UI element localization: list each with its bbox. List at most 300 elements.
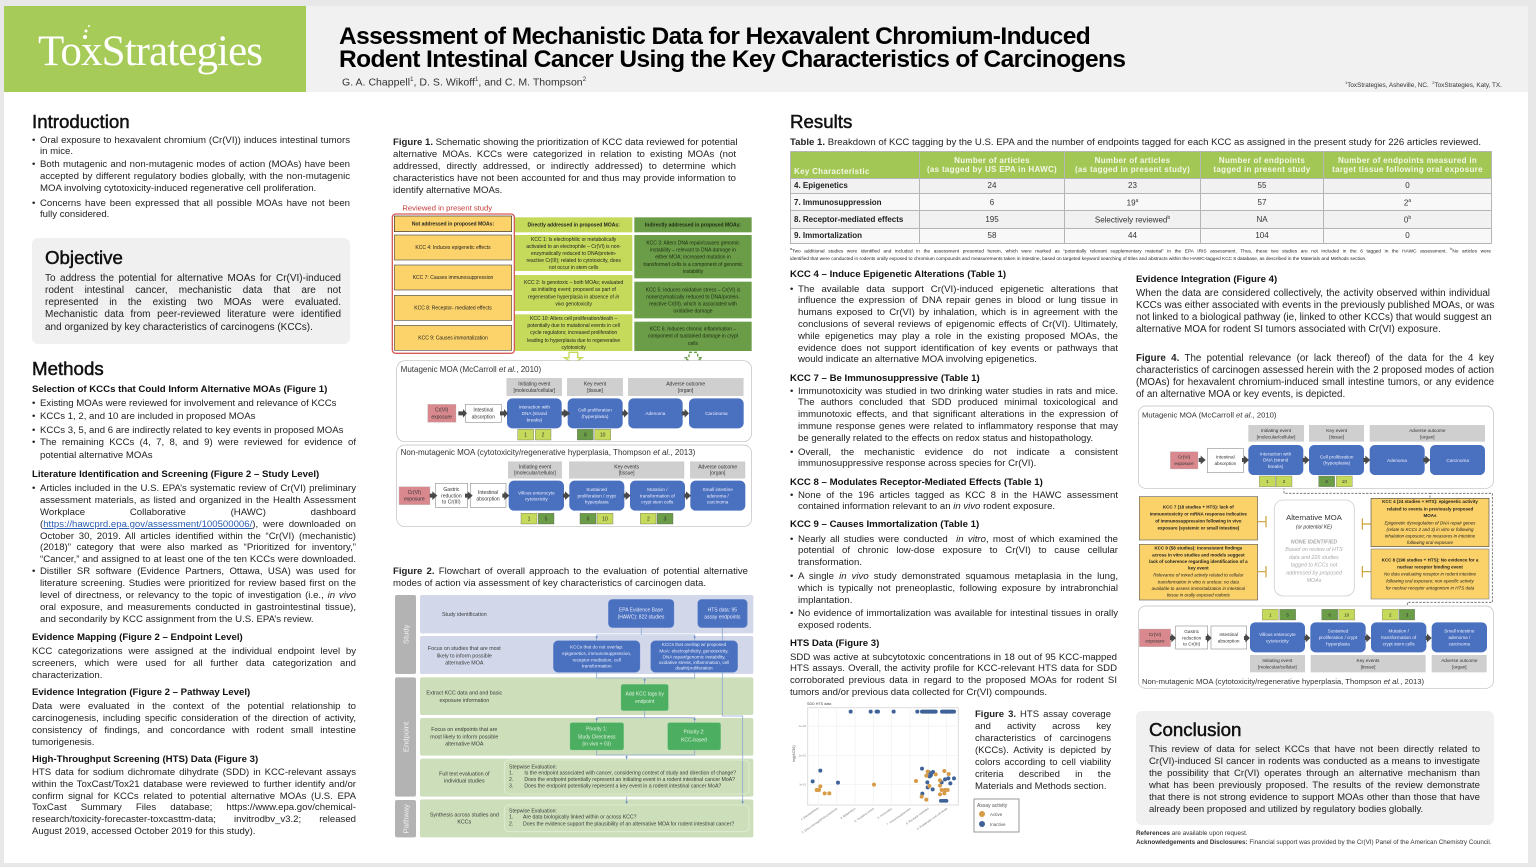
text: evidence mapping	[32, 646, 356, 681]
column: directly addressed: regenerative hyperplasia in absence of in	[528, 294, 619, 300]
text: evidence integration: consistency of findings, and concordance with rodent small intestine	[32, 725, 356, 736]
column: indirectly addressed: either MOA; increased mutation in	[655, 255, 731, 261]
box: KCC 8: for nuclear receptor antagonism in HTS data	[1386, 586, 1475, 591]
row labels: Full text evaluation of	[439, 771, 490, 777]
category axis labels: 1. Electrophilicity	[800, 806, 820, 821]
box: alternative MOA: data and 226 studies	[1289, 555, 1339, 561]
panel: non-mutagenic MOA: 6	[1328, 612, 1331, 617]
table 1: Number of articles	[954, 156, 1030, 164]
box: KCC 8: No data evaluating receptor in rodent intestine	[1384, 572, 1477, 577]
panel: non-mutagenic MOA: exposure	[404, 497, 425, 503]
panel: mutagenic MOA: [tissue]	[1329, 434, 1344, 439]
panel: non-mutagenic MOA: Cr(VI)	[408, 490, 421, 496]
column: indirectly addressed: KCC 5: Induces oxidative stress – Cr(VI) is	[646, 287, 741, 293]
stepwise evaluation boxes: Does the endpoint potentially represent a key event in a rodent intestinal cancer MoA?	[524, 784, 721, 790]
text: literature bullets: “Cancer,” and assigned to at least one of the ten KCCs were downloaded.	[40, 554, 356, 565]
text: literature bullets: Distiller SR software (Evidence Partners, Ottawa, USA) was used for	[40, 566, 356, 577]
text: HTS: research/toxicity-forecaster-toxcasttm-data; invitrodbv_v3.2; released	[32, 814, 356, 825]
text: literature bullets: (https://hawcprd.epa.gov/assessment/100500006/), were downloaded on	[40, 519, 356, 530]
table 1: 55	[1258, 181, 1266, 190]
column: directly addressed: activated to an electrophile – Cr(VI) is non-	[526, 244, 621, 250]
category axis labels: 8. Receptor-mediated	[905, 806, 930, 825]
text: evidence integration results: alternative MOA for rodent SI tumors associated with Cr(VI) exposure.	[1136, 324, 1441, 335]
stepwise evaluation boxes: Stepwise Evaluation:	[509, 764, 557, 770]
figure 3 caption: Materials and Methods section.	[975, 781, 1106, 792]
blue process boxes: KCCs that overlap w/ proposed	[662, 642, 727, 647]
panel: mutagenic MOA: Key event	[584, 382, 607, 388]
subheading: evidence integration: Evidence Integration (Figure 2 – Pathway Level)	[32, 687, 250, 698]
heading: objective: Objective	[45, 247, 123, 268]
text: KCC 7: Immunotoxicity was studied in two drinking water studies in rats and mice.	[798, 386, 1118, 397]
references and acknowledgements	[1136, 830, 1492, 846]
column: indirectly addressed: instability	[683, 269, 704, 275]
panel: non-mutagenic MOA: 5	[545, 517, 548, 523]
stepwise evaluation boxes: Does the endpoint potentially represent an initiating event in a rodent intestinal cancer MoA?	[524, 777, 735, 783]
panel: non-mutagenic MOA: 6	[587, 517, 590, 523]
plot area: 1e+03	[799, 724, 807, 728]
column: directly addressed: KCC 10: Alters cell proliferation/death –	[530, 316, 618, 322]
panel: non-mutagenic MOA: to Cr(III)	[1183, 642, 1201, 647]
panel: non-mutagenic MOA: Key events	[614, 464, 640, 470]
row labels: alternative MOA	[445, 661, 484, 667]
panel: non-mutagenic MOA: crypt stem cells	[1383, 641, 1415, 646]
stepwise evaluation boxes: 1.	[509, 815, 513, 821]
column: directly addressed: KCC 2: Is genotoxic – both MOAs; evaluated	[524, 280, 623, 286]
panel: non-mutagenic MOA: [organ]	[710, 471, 726, 477]
column: not addressed	[394, 216, 512, 350]
text: evidence integration results	[1136, 288, 1494, 335]
text: literature bullets: assessment materials, as listed and organized in the Health Assessment	[40, 495, 356, 506]
text: introduction bullets: Oral exposure to hexavalent chromium (Cr(VI)) induces intestinal tumors	[40, 135, 350, 146]
column: directly addressed: enzymatically reduced to DNA/protein-	[531, 251, 617, 257]
text: HTS: ToxCast Summary Files database; https://www.epa.gov/chemical-	[32, 802, 356, 813]
box: KCC 7: of immunosuppression following in vivo	[1155, 519, 1242, 524]
column: directly addressed: leading to hyperplasia due to regenerative	[527, 338, 620, 344]
box: alternative MOA: MOAs	[1307, 578, 1322, 584]
text: literature bullets: literature screening. Studies were prioritized for review based first on the	[40, 578, 356, 589]
column: directly addressed: Directly addressed in proposed MOAs:	[528, 223, 620, 229]
panel: mutagenic MOA: breaks)	[1268, 464, 1284, 469]
text: selection bullets: potential alternative MOAs	[40, 450, 153, 460]
figure 1 caption: characteristics have not been accounted for and thus may provide information to	[393, 173, 736, 184]
phase labels	[395, 595, 416, 837]
panel: mutagenic MOA: Cell proliferation	[578, 408, 612, 413]
column: directly addressed: cycle regulators; increased proliferation	[530, 330, 617, 336]
panel: mutagenic MOA: [molecular/cellular]	[513, 388, 556, 394]
box: KCC 4: related to events in previously proposed	[1387, 506, 1474, 511]
panel: mutagenic MOA: Intestinal	[1216, 454, 1235, 459]
subheading: HTS: High-Throughput Screening (HTS) Data (Figure 3)	[32, 754, 258, 765]
table 1: (as tagged in present study)	[1075, 165, 1190, 174]
arrow: direct to MOA	[564, 352, 582, 363]
blue process boxes: receptor-mediation, cell	[572, 657, 621, 662]
figure 1 caption: alternative MOAs. KCCs were categorized in relation to existing MOAs (not	[393, 149, 736, 160]
panel: non-mutagenic MOA: carcinoma	[1449, 641, 1470, 646]
column: indirectly addressed	[634, 217, 752, 351]
panel: non-mutagenic MOA: Initiating event	[519, 464, 552, 470]
figure 3 caption: Figure 3. HTS assay coverage	[975, 709, 1111, 720]
figure 4 caption: (MOAs) for hexavalent chromium-induced small intestine tumors, or any evidence	[1136, 377, 1494, 388]
box: KCC 7: immunotoxicity or mRNA response indicative	[1150, 512, 1247, 517]
figure 3 scatter chart	[792, 702, 959, 834]
box: alternative MOA: (or potential KE)	[1296, 524, 1332, 530]
phase labels: Pathway	[401, 804, 410, 833]
column: directly addressed: KCC 1: Is electrophilic or metabolically	[531, 237, 617, 243]
figure 3 caption: (KCCs). Activity is depicted by	[975, 745, 1111, 756]
subheading: KCC 8: KCC 8 – Modulates Receptor-Mediated Effects (Table 1)	[790, 477, 1043, 488]
panel: mutagenic MOA: Initiating event	[518, 382, 551, 388]
text: selection bullets: KCCs 1, 2, and 10 are included in proposed MOAs	[40, 411, 255, 422]
text: literature bullets: level of directness, or relevancy to the topic of investigation (i.e., in vivo	[40, 590, 356, 601]
row labels: KCCs	[457, 820, 472, 826]
row labels: alternative MOA	[445, 742, 484, 748]
green process boxes	[570, 684, 721, 750]
stepwise evaluation boxes: Is the endpoint associated with cancer, considering context of study and direction of change?	[524, 771, 736, 777]
text: KCC 9: potential of chronic low-dose exposure to Cr(VI) to cause cellular	[798, 545, 1118, 556]
text: HTS	[32, 767, 356, 837]
column: not addressed: KCC 9: Causes immortalization	[418, 335, 488, 341]
box: KCC 4: following oral exposure	[1407, 540, 1454, 545]
text: conclusion	[1149, 744, 1480, 815]
panel: non-mutagenic MOA: Villous enterocyte	[1259, 632, 1296, 637]
heading: methods: Methods	[32, 358, 104, 379]
panel: non-mutagenic MOA: [tissue]	[619, 471, 635, 477]
blue process boxes: assay endpoints	[704, 615, 741, 621]
green process boxes: Priority 2:	[683, 730, 705, 736]
phase labels: Endpoint	[401, 721, 410, 752]
box: KCC 9	[1139, 544, 1258, 600]
table 1: target tissue following oral exposure	[1332, 165, 1483, 174]
text: evidence integration	[32, 701, 356, 748]
panel: mutagenic MOA: Adverse outcome	[666, 382, 705, 388]
connectors from KCC boxes	[1258, 516, 1371, 577]
panel: non-mutagenic MOA: absorption	[1218, 638, 1240, 643]
active points	[815, 769, 951, 802]
panel: mutagenic MOA: Carcinoma	[1446, 458, 1469, 463]
text: KCC 8: contained information relevant to an in vivo rodent exposure.	[798, 501, 1055, 512]
panel: non-mutagenic MOA: Intestinal	[1219, 632, 1238, 637]
row labels: most likely to inform possible	[430, 734, 498, 740]
text: KCC 4: influence the expression of DNA repair genes in blood or lung tissue in	[798, 295, 1118, 306]
box: alternative MOA	[1274, 500, 1354, 596]
chart title: SDD HTS data	[807, 702, 832, 706]
text: KCC 9: A single in vivo study demonstrated squamous metaplasia in the lung,	[798, 571, 1118, 582]
figure 4 caption: Figure 4. The potential relevance (or lack thereof) of the data for the 4 key	[1136, 353, 1494, 364]
text: KCC 9: exposed rodents.	[798, 620, 872, 631]
panel: mutagenic MOA: Adenoma	[1387, 458, 1407, 463]
panel: mutagenic MOA: Carcinoma	[705, 411, 728, 416]
text: literature bullets	[32, 483, 356, 625]
table 1: Selectively reviewedb	[1095, 215, 1170, 225]
column: indirectly addressed: transformed cells is a component of genomic	[643, 262, 743, 268]
panel: non-mutagenic MOA: Small intestine	[1444, 629, 1475, 634]
box: KCC 9: key event	[1188, 566, 1209, 571]
logo panel	[4, 6, 306, 92]
text: HTS: within the ToxCast/Tox21 database were reviewed to further identify and/or	[32, 779, 356, 790]
panel: non-mutagenic MOA: Cr(VI)	[1149, 632, 1162, 637]
green process boxes: (in vivo + GI)	[582, 741, 611, 747]
text: KCC 9	[790, 534, 1118, 631]
figure 3 legend	[974, 798, 1020, 832]
table footnotes: a Two additional studies were identified and included in the assessment presented herein, which were marked as “potentially relevant supplementary material” in the EPA IRIS assessment. Thus, these two studies are not included in the 6 tagged in the HAWC assessment. b No articles were	[790, 247, 1491, 255]
text: KCC 4: humans exposed to Cr(VI) by inhalation, which is in agreement with the	[798, 307, 1118, 318]
table 1: 104	[1255, 231, 1269, 240]
table 1	[790, 151, 1492, 244]
text: KCC 9: Nearly all studies were conducted in vitro, most of which examined the	[798, 534, 1118, 545]
text: objective: To address the potential for alternative MOAs for Cr(VI)-induced	[45, 273, 341, 284]
blue process boxes: death/proliferation	[675, 666, 713, 671]
text: KCC 8: None of the 196 articles tagged as KCC 8 in the HAWC assessment	[798, 490, 1118, 501]
panel: non-mutagenic MOA: transformation of	[1381, 635, 1417, 640]
panel: non-mutagenic MOA: 1	[1269, 612, 1272, 617]
stepwise evaluation boxes: Does the evidence support the plausibility of an alternative MOA for rodent intestinal cancer?	[523, 822, 734, 828]
text: introduction bullets: in mice.	[40, 146, 73, 157]
text: literature bullets: Workplace Collaborative (HAWC) dashboard	[40, 507, 356, 518]
text: KCC 7: immune response genes were related to inflammatory response that may	[798, 421, 1118, 432]
panel: conclusion	[1136, 711, 1494, 825]
subheading: evidence integration figure 4: Evidence Integration (Figure 4)	[1136, 274, 1277, 285]
box: KCC 8: nuclear receptor binding event	[1397, 565, 1463, 570]
text: HTS data: SDD was active at subcytotoxic concentrations in 18 out of 95 KCC-mapped	[790, 652, 1117, 663]
text: KCC 4: evidence does not support identification of key events or pathways that	[798, 343, 1118, 354]
dashed links	[1284, 489, 1492, 610]
panel: mutagenic MOA: Initiating event	[1261, 428, 1292, 433]
text: KCC 7: immunosuppressive response across species for Cr(VI).	[798, 458, 1036, 469]
box: KCC 4: (relate to KCCs 2 and 3) in vitro or following	[1386, 527, 1474, 532]
column: directly addressed: vivo genotoxicity	[555, 301, 593, 307]
box: KCC 9: transformation in vitro is unclear; no data	[1158, 579, 1239, 584]
subheading: KCC 9: KCC 9 – Causes Immortalization (Table 1)	[790, 519, 979, 530]
panel: non-mutagenic MOA: adenoma /	[707, 493, 729, 498]
panel: non-mutagenic MOA: to Cr(III)	[442, 500, 461, 506]
column: indirectly addressed: instability – relevant to DNA damage in	[650, 248, 736, 254]
box: KCC 8	[1371, 549, 1489, 599]
panel: mutagenic MOA: Adverse outcome	[1409, 428, 1446, 433]
row backgrounds	[420, 595, 753, 837]
panel: mutagenic MOA: Intestinal	[473, 408, 493, 414]
text: KCC 9: which is typically not preneoplastic, following exposure by intrabronchial	[798, 583, 1118, 594]
box: KCC 7: exposure (systemic or small intestine)	[1157, 526, 1240, 531]
panel: mutagenic MOA: (hyperplasia)	[1323, 461, 1351, 466]
table footnotes	[790, 247, 1491, 262]
box: KCC 4: inhalation exposure; no measures in intestine	[1385, 534, 1476, 539]
panel: non-mutagenic MOA: Mutation /	[1388, 629, 1410, 634]
green process boxes: Priority 1:	[586, 726, 607, 732]
table 1: 19a	[1127, 198, 1138, 207]
stepwise evaluation boxes	[504, 760, 749, 832]
text: KCC 7: be generally related to the effects on redox status and histopathology.	[798, 433, 1093, 444]
column: indirectly addressed: nonenzymatically reduced to DNA/protein-	[646, 294, 740, 300]
table 1: 0	[1405, 231, 1410, 240]
phase labels: Study	[401, 624, 410, 644]
panel: non-mutagenic MOA: exposure	[1145, 638, 1165, 643]
panel: non-mutagenic MOA	[1138, 606, 1493, 688]
box: KCC 7	[1139, 497, 1258, 540]
figure 1 caption: Figure 1. Schematic showing the prioritization of KCC data reviewed for potential	[393, 137, 737, 148]
text: conclusion: This review of data for select KCCs that have not been directly related to	[1149, 744, 1480, 755]
blue process boxes	[553, 599, 747, 672]
box: KCC 9: Relevance of mixed activity related to cellular	[1153, 573, 1244, 578]
figure 1 diagram	[392, 203, 752, 527]
column: indirectly addressed: reactive Cr(III), which is associated with	[649, 301, 737, 307]
text: KCC 8	[790, 490, 1118, 512]
text: HTS data	[790, 652, 1117, 698]
panel: non-mutagenic MOA: 5	[1286, 612, 1289, 617]
row labels: individual studies	[444, 779, 485, 785]
blue process boxes: DNA repair/genomic instability,	[662, 654, 726, 659]
panel: mutagenic MOA: 6	[584, 433, 587, 439]
text: literature bullets: (2018)” category that were also marked as “Prioritized for inventory,”	[40, 542, 356, 553]
panel: mutagenic MOA: exposure	[1174, 461, 1194, 466]
table 1: 24	[988, 181, 996, 190]
blue process boxes: transformation	[582, 663, 612, 668]
figure 2 flowchart	[395, 595, 754, 838]
column: indirectly addressed: component of sustained damage in crypt	[648, 334, 739, 340]
plot area	[792, 708, 958, 805]
box: KCC 4: MOAs	[1423, 513, 1437, 518]
panel: non-mutagenic MOA: [molecular/cellular]	[514, 471, 556, 477]
panel: mutagenic MOA: [molecular/cellular]	[1257, 434, 1295, 439]
blue process boxes: KCCs that do not overlap:	[570, 645, 623, 650]
figure 4 caption: of an alternative MOA or key events, is depicted.	[1136, 389, 1345, 400]
table 1: 6	[990, 198, 994, 207]
subheading: literature identification: Literature Identification and Screening (Figure 2 – Study Level)	[32, 469, 319, 480]
panel: non-mutagenic MOA: 2	[647, 517, 650, 523]
logo wordmark: ToxStrategies	[38, 28, 262, 75]
panel: mutagenic MOA: Cr(VI)	[435, 408, 449, 414]
category axis labels: 6. Immunotox	[877, 806, 893, 820]
stepwise evaluation boxes: Stepwise Evaluation:	[509, 808, 557, 814]
column: indirectly addressed: oxidative damage	[673, 309, 713, 315]
box: KCC 4	[1371, 498, 1489, 547]
text: KCC 4: conclusions of several reviews of epigenomic effects of Cr(VI). Ultimately,	[798, 319, 1118, 330]
box: alternative MOA: Based on review of HTS	[1285, 547, 1343, 553]
stepwise evaluation boxes: 3.	[509, 784, 513, 790]
figure 2 caption	[393, 566, 748, 589]
panel: non-mutagenic MOA: crypt stem cells	[641, 500, 674, 505]
box: alternative MOA: Alternative MOA	[1286, 513, 1343, 522]
figure 4 caption: characteristics of carcinogen assessed herein with the 2 proposed modes of action	[1136, 365, 1494, 376]
row labels: Extract KCC data and and basic	[426, 691, 503, 697]
stepwise evaluation boxes: 1.	[509, 771, 513, 777]
affiliations: 1ToxStrategies, Asheville, NC. 2ToxStrategies, Katy, TX.	[1345, 80, 1502, 89]
panel: non-mutagenic MOA: Gastric	[1184, 629, 1200, 634]
panel: non-mutagenic MOA: Adverse outcome	[1441, 658, 1478, 663]
connectors	[597, 628, 743, 804]
panel: non-mutagenic MOA: hyperplasia	[1326, 641, 1350, 646]
column: indirectly addressed: cells	[688, 341, 698, 347]
table 1 caption: Table 1. Breakdown of KCC tagging by the U.S. EPA and the number of endpoints tagged for each KCC as assigned in the present study for 226 articles reviewed.	[790, 137, 1481, 148]
panel: mutagenic MOA: [tissue]	[587, 388, 604, 394]
text: objective: represented in the existing two MOAs were evaluated.	[45, 297, 341, 308]
text: KCC 9: implantation.	[798, 595, 852, 606]
column: directly addressed: not occur in stem cells	[549, 265, 599, 271]
text: selection bullets	[32, 398, 356, 460]
connector arrowheads	[595, 637, 744, 803]
panel: mutagenic MOA: 1	[524, 433, 527, 439]
row labels: Study identification	[442, 612, 487, 618]
table 1: 2a	[1404, 198, 1411, 207]
text: HTS data: tumors and/or previous data collected for Cr(VI) compounds.	[790, 687, 1047, 698]
column: not addressed: Not addressed in proposed MOAs:	[412, 222, 494, 228]
subheading: HTS data: HTS Data (Figure 3)	[790, 638, 879, 649]
references and acknowledgements: References are available upon request.	[1136, 830, 1248, 837]
box: alternative MOA: addressed by proposed	[1286, 570, 1343, 576]
blue process boxes: EPA Evidence Base	[619, 607, 663, 613]
title: Rodent Intestinal Cancer Using the Key Characteristics of Carcinogens	[339, 46, 1125, 73]
panel: non-mutagenic MOA: 3	[664, 517, 667, 523]
table 1: 23	[1128, 181, 1137, 190]
panel: non-mutagenic MOA: Intestinal	[478, 490, 498, 496]
figure 2 caption: Figure 2. Flowchart of overall approach to the evaluation of potential alternative	[393, 566, 748, 577]
panel: mutagenic MOA: Adenoma	[645, 411, 666, 416]
panel: mutagenic MOA: Cr(VI)	[1178, 455, 1191, 460]
panel: non-mutagenic MOA: proliferation / crypt	[578, 493, 617, 498]
category axis labels: 5. Oxidative stress	[854, 806, 875, 823]
panel: non-mutagenic MOA: Mutation /	[647, 487, 668, 492]
column: not addressed: KCC 8: Receptor- mediated effects	[414, 305, 492, 311]
table footnotes: identified that were conducted in rodents orally exposed to chromium compounds and measurements taken in intestine, based on targeted keyword searching of titles and abstracts within the HAWC-tagged KCC 8 database, as described in the Materials and Methods section.	[790, 257, 1366, 262]
panel: non-mutagenic MOA: cytotoxicity	[1266, 638, 1289, 643]
figure 1 caption: addressed, directly addressed, or indirectly addressed) to determine which	[393, 161, 736, 172]
category axis labels: 7. Immunosuppression	[886, 806, 912, 826]
text: evidence integration results: not linked to a biological pathway (ie, linked to other KCCs) that would suggest an	[1136, 312, 1492, 323]
table 1: 7. Immunosuppression	[794, 198, 882, 207]
figure 1 caption	[393, 137, 737, 196]
green process boxes: Add KCC tags by	[625, 692, 664, 698]
table 1: Key Characteristic	[794, 166, 870, 176]
text: literature bullets: and secondarily by KCC assignment from the U.S. EPA’s review.	[40, 614, 314, 625]
text: KCC 7: The authors concluded that SDD produced minimal toxicological and	[798, 397, 1118, 408]
text: introduction bullets: fully considered.	[40, 209, 109, 220]
panel: mutagenic MOA: 2	[1283, 479, 1286, 484]
text: introduction bullets	[32, 135, 350, 220]
text: conclusion: already been proposed and utilized by regulatory bodies globally.	[1149, 804, 1423, 815]
text: KCC 7: immunotoxic effects, and that significant alterations in the expression of	[798, 409, 1118, 420]
box: KCC 9: available to assess immortalization in intestinal	[1152, 586, 1246, 591]
panel: non-mutagenic MOA: reduction	[441, 493, 462, 499]
panel: mutagenic MOA: 10	[1342, 479, 1347, 484]
box: alternative MOA: tagged to KCCs not	[1291, 563, 1338, 569]
panel: mutagenic MOA: absorption	[1214, 461, 1237, 466]
panel: non-mutagenic MOA: Villous enterocyte	[518, 490, 555, 495]
panel: non-mutagenic MOA: Sustained	[1328, 629, 1349, 634]
category axis labels: 2. Direct damage/DNA/cytotoxicity	[801, 806, 839, 834]
text: introduction bullets: accepted by different regulatory bodies globally, with the non-mutagenic	[40, 171, 350, 182]
text: KCC 4	[790, 284, 1118, 365]
subheading: KCC 4: KCC 4 – Induce Epigenetic Alterations (Table 1)	[790, 269, 1006, 280]
subheading: selection of KCCs: Selection of KCCs that Could Inform Alternative MOAs (Figure 1)	[32, 384, 327, 395]
text: evidence integration: Data were evaluated in the context of the potential relationship to	[32, 701, 356, 712]
blue process boxes: HTS data: 95	[708, 607, 737, 613]
panel: mutagenic MOA: 2	[542, 433, 545, 439]
header band	[4, 6, 1528, 92]
column: indirectly addressed: KCC 6: Induces chronic inflammation –	[650, 327, 736, 333]
row labels: Focus on studies that are most	[428, 646, 501, 652]
table 1: 8. Receptor-mediated effects	[794, 215, 903, 224]
figure 3 legend: Active	[990, 812, 1003, 817]
text: HTS: confirm signal for KCCs related to potential alternative MOAs (U.S. EPA	[32, 790, 356, 802]
panel: non-mutagenic MOA: transformation of	[640, 493, 676, 498]
text: objective	[45, 273, 341, 332]
box: KCC 4: KCC 4 (24 studies + HTS): epigenetic activity	[1382, 499, 1478, 504]
panel: non-mutagenic MOA: Initiating event	[1262, 658, 1293, 663]
text: evidence mapping: characterization.	[32, 670, 102, 681]
row labels: likely to inform possible	[437, 653, 492, 659]
panel: non-mutagenic MOA: Adverse outcome	[698, 464, 737, 470]
panel: non-mutagenic MOA: reduction	[1182, 635, 1202, 640]
text: evidence integration results: When the data are considered collectively, the activity observed within individual	[1136, 288, 1490, 299]
